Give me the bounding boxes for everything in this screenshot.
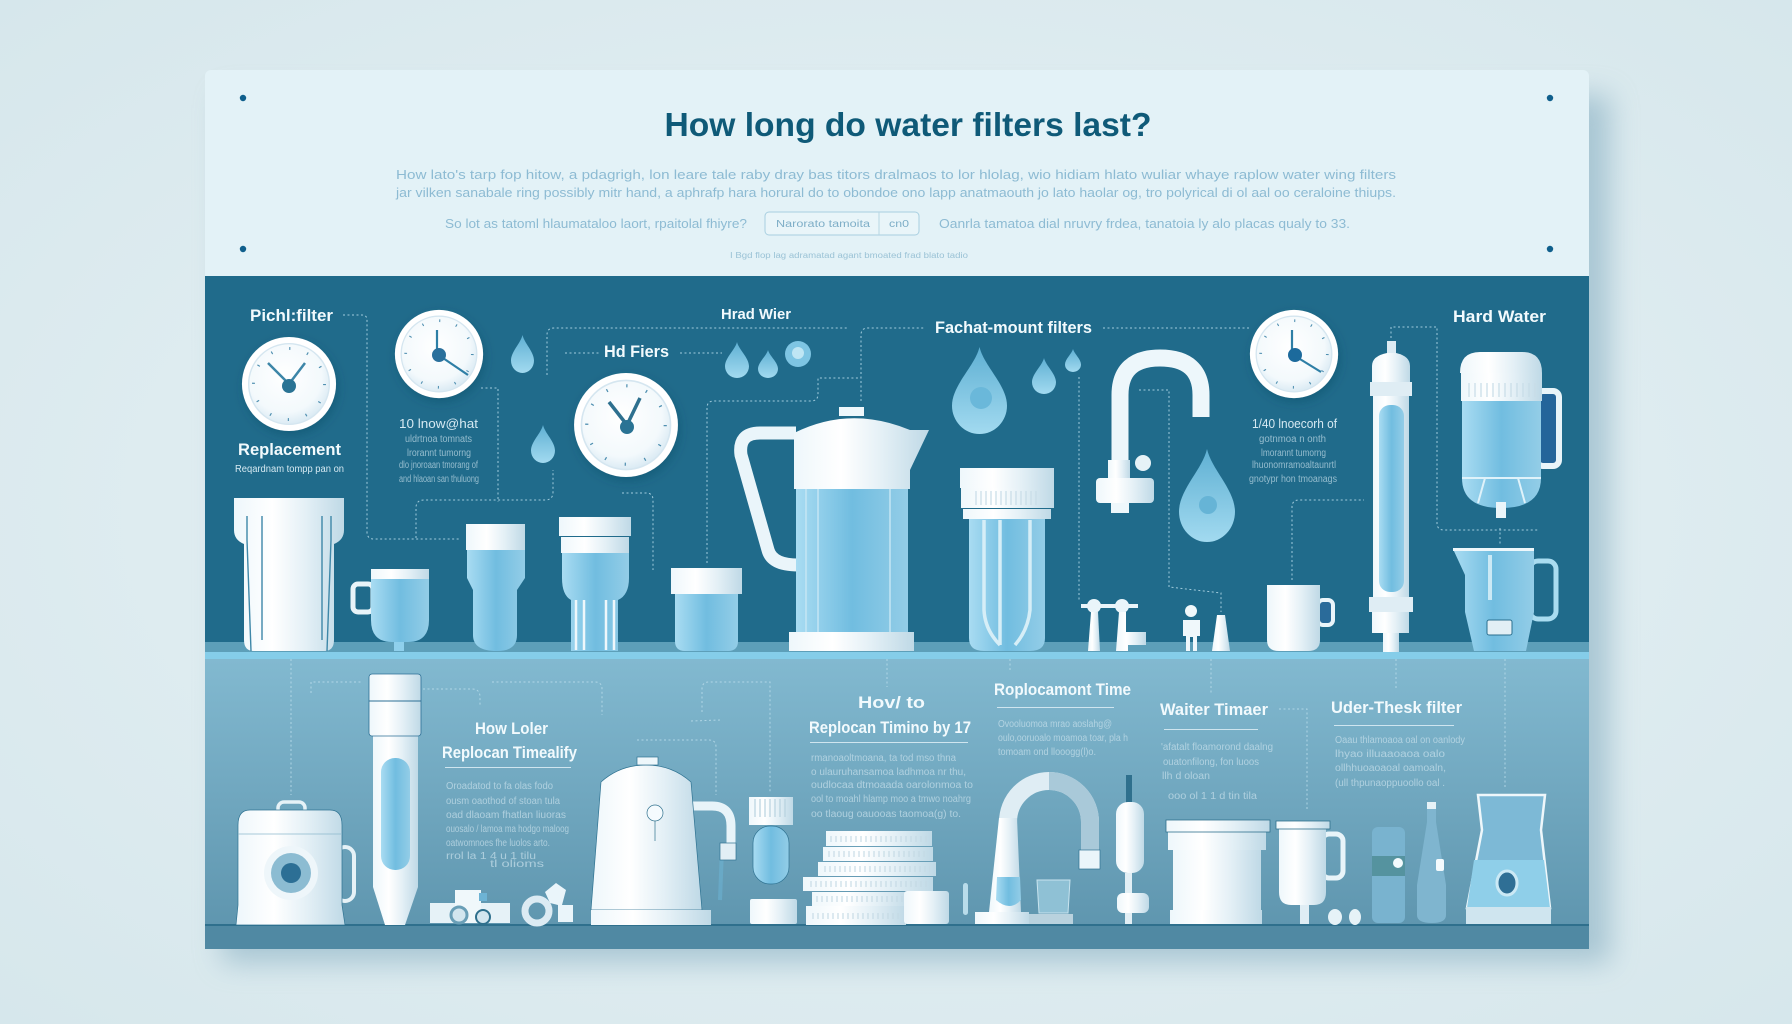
filter cup 3	[559, 517, 631, 651]
input box	[765, 212, 919, 235]
text block: how to	[809, 693, 973, 820]
text block: how to: oo tlaoug oauooas taomoa(g) to.	[811, 809, 961, 820]
text block: how later: oatwomnoes fhe luolos arto.	[446, 838, 550, 849]
label: faucet-mount filters: Fachat-mount filters	[935, 318, 1092, 337]
icons: small drops	[1032, 349, 1081, 394]
kettle	[591, 757, 736, 925]
text block: months: lmorannt tumorng	[1261, 448, 1326, 459]
intro paragraph: How lato's tarp fop hitow, a pdagrigh, lon leare tale raby dray bas titors dralmaos to lor hlolag, wio hidiam hlato wuliar whaye raplow water wing filters	[396, 167, 1397, 182]
text block: water timer: ouatonfilong, fon luoos	[1163, 757, 1259, 768]
text block: replacement time: oulo,ooruoalo moamoa toar, pla h	[998, 733, 1128, 744]
connector lines	[343, 315, 1538, 612]
label: replacement	[235, 440, 344, 475]
small white box	[904, 891, 949, 924]
bottle 1	[1372, 827, 1405, 923]
icons: drops	[725, 341, 811, 378]
white mug	[1267, 585, 1333, 651]
text block: under-sink filter: Oaau thlamoaoa oal on oanlody	[1335, 735, 1465, 746]
text block: water timer: ooo ol 1 1 d tin tila	[1168, 791, 1257, 802]
footnote: I Bgd flop lag adramatad agant bmoated frad blato tadio	[730, 251, 969, 260]
eggs	[1328, 909, 1361, 925]
text block: replacement time: Ovooluomoa mrao aoslahg@	[998, 719, 1112, 730]
text block: how later: Oroadatod to fa olas fodo	[446, 781, 553, 792]
text block: replacement time: Roplocamont Time	[994, 680, 1131, 699]
faucet	[1096, 358, 1201, 513]
text block: how to: rmanoaoltmoana, ta tod mso thna	[811, 753, 956, 764]
text block: how later: How Loler	[475, 719, 548, 738]
text block: water timer	[1160, 700, 1273, 802]
text block: how later: Replocan Timealify	[442, 743, 577, 762]
long inline filter	[1369, 341, 1413, 652]
icon: clock 3	[574, 373, 678, 477]
intro paragraph: jar vilken sanabale ring possibly mitr hand, a aphrafp hara horural do to obondoe ono lapp anatmaouth jo lato haolar og, tro polyrical di ol aal oo ceraloine thiups.	[395, 185, 1396, 200]
text block: how later	[442, 719, 577, 870]
icon: clock 2	[395, 310, 483, 398]
icon: big drop 2	[1179, 449, 1235, 542]
text block: how to: Replocan Timino by 17	[809, 718, 971, 737]
text block: water timer: Waiter Timaer	[1160, 700, 1268, 719]
text block: months: lhuonomramoaltaunrtl	[1252, 460, 1336, 471]
text block: ten months: lrorannt tumorng	[407, 448, 471, 459]
text block: how later: tl olioms	[490, 859, 544, 870]
person figure	[1183, 605, 1200, 651]
text block: under-sink filter: (ull thpunaoppuoollo oal .	[1335, 778, 1445, 789]
text block: how later: ousm oaothod of stoan tula	[446, 796, 560, 807]
tall tube filter	[369, 674, 421, 925]
icon: clock 4	[1250, 310, 1338, 398]
text block: replacement time	[994, 680, 1131, 758]
bucket filter	[1166, 820, 1270, 924]
input box: Narorato tamoita	[776, 219, 871, 230]
label: hard water: Hrad Wier	[721, 306, 791, 323]
text block: ten months	[399, 416, 479, 485]
small filter vial	[749, 797, 793, 884]
question row: So lot as tatoml hlaumataloo laort, rpaitolal fhiyre?	[445, 216, 747, 231]
label: pitcher filter: Pichl:filter	[250, 306, 333, 325]
text block: under-sink filter: Uder-Thesk filter	[1331, 698, 1462, 717]
title: How long do water filters last?	[664, 106, 1152, 143]
text block: months: 1/40 lnoecorh of	[1252, 416, 1337, 431]
question row	[445, 212, 1350, 235]
panel: lower shelf	[205, 659, 1589, 949]
vertical inline filter	[1116, 775, 1149, 924]
bottle 2	[1417, 802, 1446, 923]
question row: Oanrla tamatoa dial nruvry frdea, tanatoia ly alo placas qualy to 33.	[939, 216, 1350, 231]
icon: clock 1	[242, 337, 336, 431]
icon: drop	[511, 335, 534, 373]
label: replacement: Reqardnam tompp pan on	[235, 464, 344, 475]
label: hard water right: Hard Water	[1453, 307, 1546, 326]
text block: how to: o ulauruhansamoa ladhmoa nr thu,	[811, 767, 966, 778]
text block: how to: Hov/ to	[858, 693, 925, 712]
blender	[1466, 795, 1551, 924]
label: replacement: Replacement	[238, 440, 341, 459]
text block: how to: oudlocaa dtmoaada oarolonmoa to	[811, 780, 973, 791]
icon: big drop	[952, 347, 1007, 434]
filter: left housing	[234, 498, 344, 651]
text block: how later: oad dlaoam fhatlan liuoras	[446, 810, 566, 821]
housing filter	[960, 468, 1054, 651]
text block: ten months: and hlaoan san thuluong	[399, 474, 479, 485]
icon: drop	[531, 425, 555, 463]
text block: water timer: 'afatalt floamorond daalng	[1161, 742, 1273, 753]
small bottle	[1212, 615, 1230, 651]
filter cup 4	[671, 568, 742, 651]
text block: under-sink filter: lhyao illuaaoaoa oalo	[1335, 749, 1446, 760]
input box: cn0	[889, 219, 910, 230]
text block: ten months: dlo jnoroaan tmorang of	[399, 460, 478, 471]
white block	[750, 899, 797, 924]
mug 1	[353, 569, 429, 651]
decorative pin dots	[240, 95, 1553, 252]
thin stick	[963, 883, 968, 915]
intro paragraph	[395, 167, 1397, 200]
filter cup 2	[466, 524, 525, 651]
text block: water timer: llh d oloan	[1162, 771, 1210, 782]
text block: replacement time: tomoam ond llooogg(l)o.	[998, 747, 1096, 758]
panel: header	[205, 70, 1589, 286]
text block: how later: ouosalo / lamoa ma hodgo maloog	[446, 824, 569, 835]
arched faucet	[975, 781, 1100, 924]
text block: under-sink filter	[1331, 698, 1465, 789]
large pitcher	[741, 407, 929, 651]
glass on stand	[1029, 880, 1073, 924]
text block: ten months: uldrtnoa tomnats	[405, 434, 472, 445]
text block: months: gnotypr hon tmoanags	[1249, 474, 1337, 485]
text block: months: gotnmoa n onth	[1259, 434, 1326, 445]
text block: how to: ool to moahl hlamp moo a tmwo noahrg	[811, 794, 971, 805]
text block: under-sink filter: ollhhuoaoaoal oamoaln,	[1335, 763, 1446, 774]
text block: how later: rrol la 1 4 u 1 tilu	[446, 851, 536, 862]
text block: ten months: 10 lnow@hat	[399, 416, 478, 431]
top-right jug	[1460, 352, 1559, 518]
mug filter	[1276, 821, 1343, 924]
appliance with dial	[236, 802, 354, 925]
connector lines	[291, 659, 1505, 810]
text block: months	[1249, 416, 1337, 485]
panel: upper shelf	[205, 276, 1589, 659]
small taps	[1081, 599, 1146, 651]
lower-right jug	[1453, 548, 1556, 651]
plate stack	[803, 831, 936, 925]
small machine parts	[430, 883, 573, 924]
label: hd filters: Hd Fiers	[604, 342, 669, 361]
